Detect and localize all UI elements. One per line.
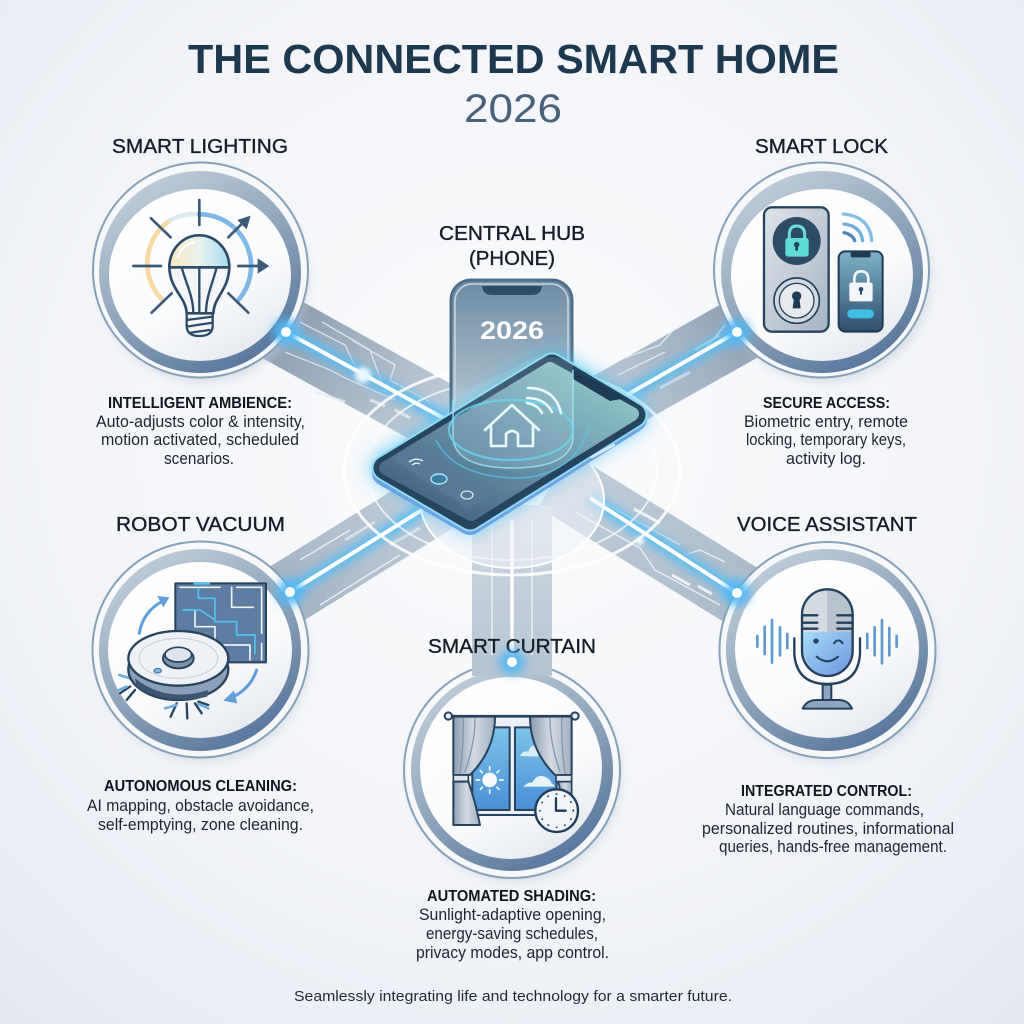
node: smart curtain: [404, 636, 621, 962]
text: autonomous cleaning: AUTONOMOUS CLEANING:: [104, 778, 297, 795]
phone side edge: [385, 370, 634, 522]
connector overlap on ring: [472, 655, 552, 676]
text: intelligent ambience: scenarios.: [164, 450, 234, 468]
text: intelligent ambience: [96, 395, 305, 468]
phone year: 2026: [480, 317, 544, 345]
heading: smart lock: SMART LOCK: [755, 136, 889, 158]
text: intelligent ambience: Auto-adjusts color & intensity,: [96, 413, 305, 431]
connector: voice: [538, 453, 774, 632]
phone notch: [573, 370, 627, 401]
text: autonomous cleaning: [87, 778, 314, 834]
connector end glows: [273, 319, 750, 674]
hub radiating rings: [344, 365, 680, 575]
text: integrated control: INTEGRATED CONTROL:: [741, 783, 912, 800]
text: intelligent ambience: INTELLIGENT AMBIENCE:: [108, 395, 292, 412]
phone screen: [386, 369, 632, 514]
heading: central hub: CENTRAL HUB: [439, 223, 585, 245]
heading: robot vacuum: ROBOT VACUUM: [116, 514, 285, 536]
node: robot vacuum: [87, 514, 314, 834]
connector: lighting: [253, 293, 496, 469]
upright phone: [451, 280, 572, 470]
heading: central hub: [439, 223, 585, 270]
icon: home with wifi: [485, 388, 561, 446]
heading: central hub: (PHONE): [469, 248, 555, 270]
connector: curtain: [472, 505, 552, 690]
text: automated shading: [416, 888, 609, 962]
node: voice assistant: [702, 514, 954, 856]
central hub phone: [385, 280, 634, 522]
node: smart lighting: [93, 136, 309, 468]
text: autonomous cleaning: self-emptying, zone cleaning.: [98, 816, 303, 834]
glow: [385, 366, 634, 518]
subtitle year: 2026: [464, 87, 562, 131]
node: smart lock: [714, 136, 931, 468]
connector: vacuum: [253, 453, 487, 631]
connector: lock: [529, 294, 771, 468]
footer tagline: Seamlessly integrating life and technology for a smarter future.: [294, 988, 732, 1005]
text: secure access: activity log.: [786, 450, 866, 468]
text: integrated control: personalized routines, informational: [702, 820, 954, 838]
icon: robot vacuum and map: [119, 582, 266, 718]
text: secure access: locking, temporary keys,: [746, 431, 906, 449]
text: integrated control: queries, hands-free management.: [719, 838, 947, 856]
heading: voice assistant: VOICE ASSISTANT: [737, 514, 917, 536]
text: automated shading: AUTOMATED SHADING:: [427, 888, 596, 905]
text: automated shading: energy-saving schedules,: [426, 925, 598, 943]
text: integrated control: Natural language commands,: [725, 801, 924, 819]
hologram column: [453, 357, 573, 468]
phone bezel: [385, 366, 634, 518]
text: secure access: SECURE ACCESS:: [763, 395, 890, 412]
text: autonomous cleaning: AI mapping, obstacle avoidance,: [87, 797, 314, 815]
phone button: [592, 445, 614, 457]
icon: microphone with smile: [757, 589, 897, 709]
icon: light bulb: [133, 200, 269, 336]
heading: smart lighting: SMART LIGHTING: [112, 136, 288, 158]
icon: smart lock and phone: [764, 207, 883, 332]
phone screen rings: [436, 400, 590, 478]
text: secure access: Biometric entry, remote: [744, 413, 908, 431]
text: secure access: [744, 395, 908, 468]
title: THE CONNECTED SMART HOME: [188, 36, 839, 82]
app dock: [402, 452, 482, 502]
heading: smart curtain: SMART CURTAIN: [428, 636, 596, 658]
icon: window with curtains and clock: [445, 712, 579, 832]
text: automated shading: privacy modes, app control.: [416, 944, 609, 962]
text: automated shading: Sunlight-adaptive opening,: [419, 906, 606, 924]
text: intelligent ambience: motion activated, scheduled: [101, 431, 299, 449]
text: integrated control: [702, 783, 954, 856]
phone glow rim: [385, 366, 634, 518]
